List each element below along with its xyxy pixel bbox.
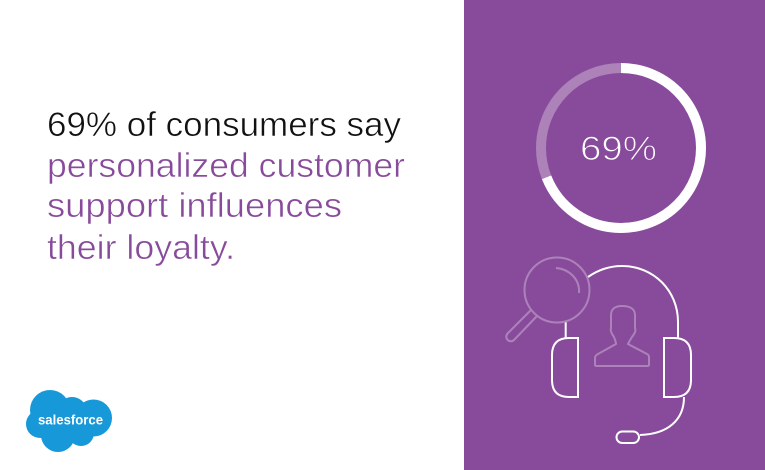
panel: purple sidebar	[464, 0, 765, 470]
headline: 69% of consumers say	[47, 106, 401, 144]
donut chart: 69%	[541, 68, 701, 228]
icon: magnifying glass	[506, 258, 590, 341]
headline: their loyalty.	[47, 229, 235, 267]
headline: personalized customer	[47, 147, 405, 185]
icon: person silhouette	[595, 306, 649, 366]
logo: salesforce	[26, 390, 112, 452]
headline: support influences	[47, 187, 342, 225]
donut chart: 69%: 69%	[580, 130, 657, 168]
logo: salesforce: salesforce	[38, 412, 103, 428]
headline	[47, 106, 405, 267]
icon: headset	[552, 266, 691, 443]
